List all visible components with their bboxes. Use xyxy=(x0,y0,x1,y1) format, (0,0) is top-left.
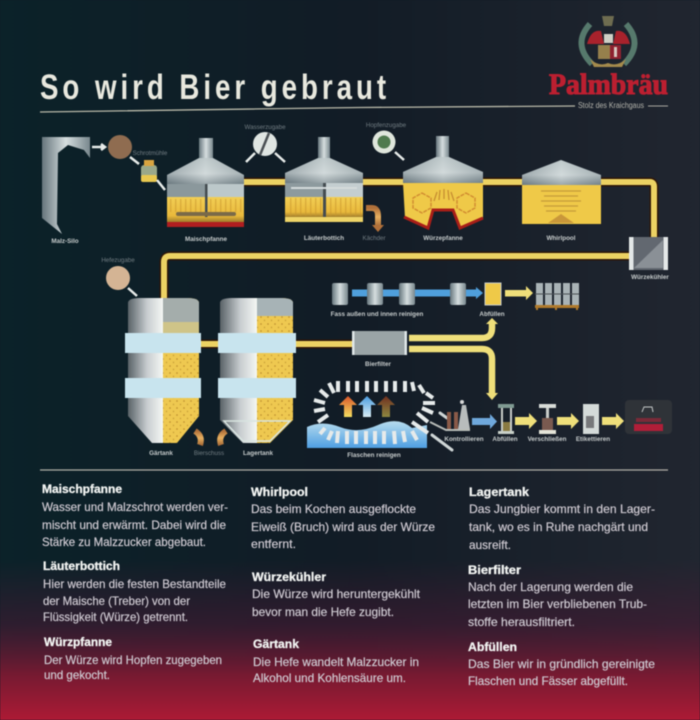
keg cleaning line xyxy=(331,283,483,318)
bottle conveyor xyxy=(432,413,452,450)
text: Bierfilter: Bierfilter xyxy=(468,565,522,577)
filling machine xyxy=(492,404,518,443)
vessel: Würzekühler xyxy=(629,237,669,281)
text: Läuterbottich: Flüssigkeit (Würze) getrennt. xyxy=(43,610,188,624)
arrow: malt to mill xyxy=(130,157,139,164)
bottle washer xyxy=(307,381,452,459)
label: Kontrollieren: Kontrollieren xyxy=(444,436,484,443)
text: Abfüllen: Abfüllen xyxy=(468,642,517,654)
text: Abfüllen xyxy=(468,642,655,688)
label: Treber: Kächder xyxy=(362,235,386,242)
text: Würzpfanne: Der Würze wird Hopfen zugegeben xyxy=(44,653,222,667)
icon: malt xyxy=(108,135,132,159)
label: Bierhefe: Bierschuss xyxy=(194,450,224,457)
text: Lagertank: Das Jungbier kommt in den Lager- xyxy=(469,502,655,516)
text: Bierfilter: Nach der Lagerung werden die xyxy=(468,580,633,594)
arrow: Treber xyxy=(362,208,386,242)
arrow: control to filling xyxy=(472,414,497,429)
text: Bierfilter xyxy=(468,565,647,629)
text: Gärtank xyxy=(253,639,419,685)
logo wordmark: Palmbräu xyxy=(549,68,668,101)
text: Lagertank: tank, wo es in Ruhe nachgärt und xyxy=(469,520,648,534)
text: Maischpfanne: Maischpfanne xyxy=(42,484,122,496)
text: Würzpfanne xyxy=(44,637,222,682)
arrow: filter to keg filling xyxy=(409,318,498,338)
text: Bierfilter: stoffe herausfiltriert. xyxy=(468,615,575,629)
label: Whirlpool: Whirlpool xyxy=(546,235,576,242)
label: Würzepfanne: Würzepfanne xyxy=(423,235,463,242)
label: Etikettieren: Etikettieren xyxy=(576,436,610,443)
label: Verschließen: Verschließen xyxy=(528,436,567,443)
arrow: filter to bottling xyxy=(409,349,498,400)
icon: Wasserzugabe: Wasserzugabe xyxy=(244,124,286,131)
label: Flaschen reinigen: Flaschen reinigen xyxy=(347,452,401,459)
icon: Wasserzugabe xyxy=(244,124,286,162)
text: Whirlpool: Das beim Kochen ausgeflockte xyxy=(251,502,416,516)
icon: Hopfenzugabe xyxy=(366,122,407,160)
text: Abfüllen: Flaschen und Fässer abgefüllt. xyxy=(468,674,628,688)
logo tagline: Stolz des Kraichgaus xyxy=(578,101,644,110)
text: Whirlpool: Eiweiß (Bruch) wird aus der Würze xyxy=(251,520,435,534)
text: Whirlpool: entfernt. xyxy=(251,537,296,551)
label: Schrotmühle: Schrotmühle xyxy=(133,150,168,157)
pipe: cooler to fermentation tank xyxy=(164,256,630,298)
label: Bierfilter: Bierfilter xyxy=(365,361,391,368)
text: Gärtank: Alkohol und Kohlensäure um. xyxy=(253,671,406,685)
arrow: keg filling to pallet xyxy=(505,286,533,300)
keg pallet xyxy=(535,283,579,310)
pipe: tanks to filter xyxy=(199,340,352,348)
capping machine xyxy=(528,404,567,443)
pipe: wort line xyxy=(244,182,654,238)
logo: Palmbräu xyxy=(549,16,668,110)
text: Gärtank: Gärtank xyxy=(253,639,300,651)
arrow: filling to capping xyxy=(515,413,537,429)
text: Läuterbottich: Hier werden die festen Bestandteile xyxy=(43,577,226,591)
arrow: labelling to crate xyxy=(602,413,624,429)
text: Lagertank: ausreift. xyxy=(469,538,511,552)
tank: Gärtank xyxy=(125,298,201,457)
section rule xyxy=(40,469,668,471)
text: Würzpfanne: und gekocht. xyxy=(44,668,110,682)
arrows: hot, cold, lye xyxy=(339,396,395,417)
text: Maischpfanne: Wasser und Malzschrot werden ver- xyxy=(42,500,228,514)
text: Abfüllen: Das Bier wir in gründlich gereinigte xyxy=(468,657,655,671)
label: Malz-Silo: Malz-Silo xyxy=(51,238,79,245)
text: Läuterbottich: der Maische (Treber) von der xyxy=(43,594,190,608)
vessel: Läuterbottich xyxy=(285,137,363,242)
mill xyxy=(133,150,168,182)
label: Gärtank: Gärtank xyxy=(149,450,173,457)
title rule xyxy=(40,106,575,112)
vessel: Maischpfanne xyxy=(167,138,244,243)
text: Gärtank: Die Hefe wandelt Malzzucker in xyxy=(253,655,419,669)
text: Würzpfanne: Würzpfanne xyxy=(44,637,112,649)
bottle carousel xyxy=(314,381,435,444)
label: Maischpfanne: Maischpfanne xyxy=(185,236,227,243)
text: Whirlpool xyxy=(251,487,435,551)
label: Fass reinigen: Fass außen und innen reinigen xyxy=(331,311,424,318)
label: Läuterbottich: Läuterbottich xyxy=(304,235,344,242)
logo crest xyxy=(581,16,635,67)
arrow: capping to labelling xyxy=(557,413,579,429)
logo rule right xyxy=(648,105,668,107)
vessel: Whirlpool xyxy=(522,160,601,242)
text: Lagertank xyxy=(469,487,655,552)
text: Läuterbottich: Läuterbottich xyxy=(43,561,120,573)
label: Würzekühler: Würzekühler xyxy=(631,274,669,281)
keg filling xyxy=(479,283,505,318)
title: So wird Bier gebraut xyxy=(40,68,390,107)
label: Lagertank: Lagertank xyxy=(243,450,274,457)
text: Läuterbottich xyxy=(43,561,226,624)
arrow: mill to mash tun xyxy=(157,180,165,190)
icon: kegs xyxy=(332,283,466,305)
arrows: Bierhefe xyxy=(194,431,226,457)
text: Whirlpool: Whirlpool xyxy=(251,487,308,499)
text: Würzekühler: Die Würze wird heruntergekühlt xyxy=(252,587,421,601)
beer crate xyxy=(625,400,672,434)
control station xyxy=(430,400,484,443)
icon: Hopfenzugabe: Hopfenzugabe xyxy=(366,122,407,129)
text: Maischpfanne: Stärke zu Malzzucker abgebaut. xyxy=(42,535,206,549)
beer filter xyxy=(352,331,407,368)
label: Abfüllen: Abfüllen xyxy=(479,311,505,318)
text: Maischpfanne xyxy=(42,484,228,549)
label: Abfüllen: Abfüllen xyxy=(492,436,518,443)
text: Würzekühler: Würzekühler xyxy=(252,572,327,584)
text: Bierfilter: letzten im Bier verbliebenen Trub- xyxy=(468,597,647,611)
text: Würzekühler: bevor man die Hefe zugibt. xyxy=(252,605,394,619)
tank: Lagertank xyxy=(218,298,296,457)
arrow: silo to malt xyxy=(92,144,105,150)
malt silo xyxy=(42,137,90,245)
labelling machine xyxy=(576,404,610,443)
icon: Hefezugabe xyxy=(101,257,137,296)
text: Lagertank: Lagertank xyxy=(469,487,530,499)
text: Maischpfanne: mischt und erwärmt. Dabei wird die xyxy=(42,518,226,532)
vessel: Würzepfanne xyxy=(403,136,483,242)
text: Würzekühler xyxy=(252,572,421,619)
icon: Hefezugabe: Hefezugabe xyxy=(101,257,135,264)
